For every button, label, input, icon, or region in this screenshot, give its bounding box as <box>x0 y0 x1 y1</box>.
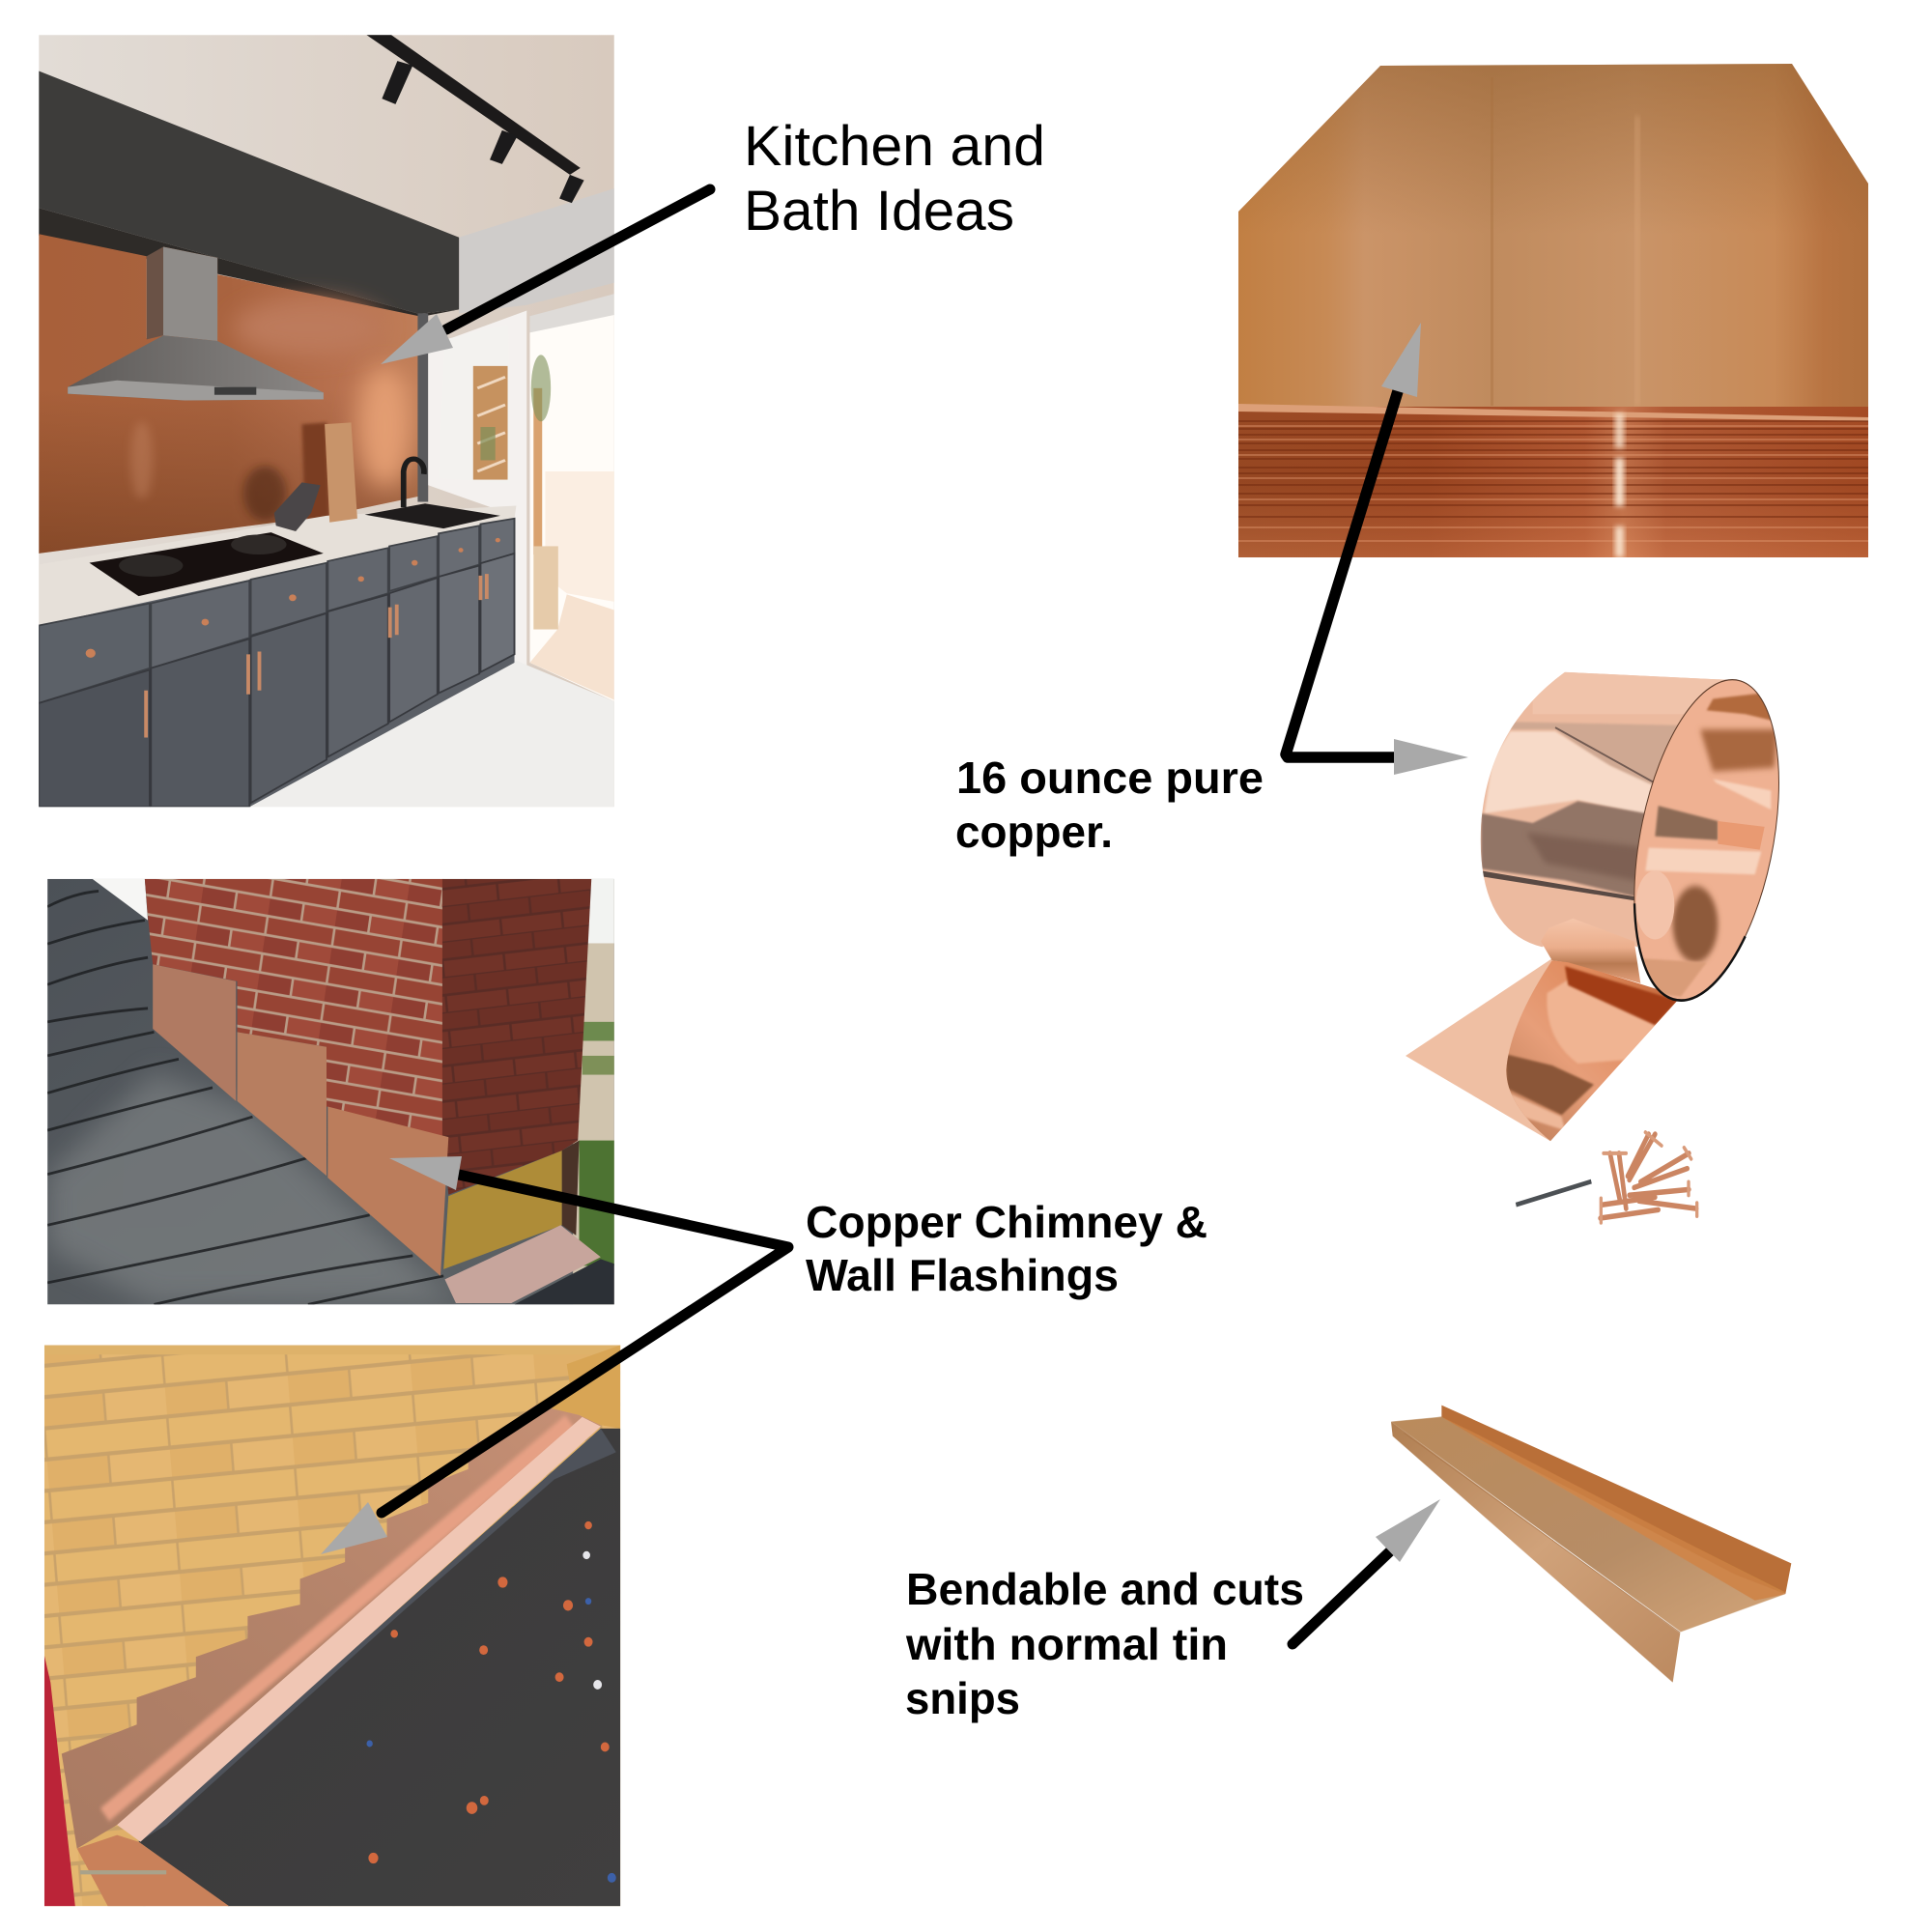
shingle lines <box>47 891 443 1304</box>
hob <box>89 532 324 596</box>
roof membrane <box>138 1429 620 1906</box>
copper backsplash <box>39 234 419 554</box>
curved tail <box>1506 960 1677 1142</box>
flat sheet tail <box>1406 958 1558 1141</box>
window <box>428 310 526 666</box>
text: Kitchen and Bath Ideas <box>744 115 1045 242</box>
copper flashing panels <box>153 964 236 1101</box>
roll interior <box>1634 680 1778 999</box>
text: Bendable and cuts with normal tin snips: snips <box>905 1673 1020 1723</box>
curl <box>1541 919 1640 983</box>
track lights <box>366 35 584 203</box>
base flashing <box>444 1225 601 1303</box>
arrow: to chimney and wall flashing <box>321 1156 788 1554</box>
cutting board <box>325 422 357 523</box>
range hood <box>68 246 324 400</box>
reflections <box>1528 1465 1761 1594</box>
photo: stepped copper flashing on yellow brick wall <box>44 1345 620 1906</box>
cabinets <box>39 519 515 807</box>
brick side <box>442 879 591 1195</box>
floor <box>249 660 614 807</box>
sink <box>365 503 500 528</box>
bottom copper <box>77 1835 229 1906</box>
text: Bendable and cuts with normal tin snips <box>905 1564 1304 1723</box>
photo: copper sheet stack <box>1238 58 1868 557</box>
top right copper <box>536 1345 620 1429</box>
sky gap <box>93 879 148 921</box>
front drop <box>1391 1422 1680 1683</box>
text: Kitchen and Bath Ideas: Bath Ideas <box>744 180 1014 242</box>
inner rim <box>1609 662 1804 1018</box>
copper highlight <box>104 1422 570 1815</box>
text: 16 ounce pure copper <box>955 753 1264 857</box>
roll outer surface <box>1475 668 1746 951</box>
text: Bendable and cuts with normal tin snips: with normal tin <box>905 1619 1228 1669</box>
nails <box>1601 1132 1697 1223</box>
brass corner flashing <box>443 1151 562 1269</box>
text: Copper Chimney and Wall Flashings: Wall Flashings <box>806 1250 1119 1300</box>
counter <box>39 506 516 607</box>
photo: copper Z-flashing <box>1391 1406 1791 1683</box>
arrow: to kitchen <box>381 189 710 364</box>
base <box>1391 1417 1785 1632</box>
balcony <box>529 294 614 701</box>
text: Bendable and cuts with normal tin snips: Bendable and cuts <box>906 1564 1304 1614</box>
text: 16 ounce pure copper: copper. <box>955 807 1113 857</box>
arrow: to copper sheet and roll <box>1286 323 1468 775</box>
photo: brick chimney with copper flashing <box>47 879 614 1304</box>
lit shingles <box>47 1072 456 1304</box>
text: 16 ounce pure copper: 16 ounce pure <box>956 753 1264 803</box>
drill bit <box>1516 1181 1591 1205</box>
back wall <box>1441 1406 1791 1594</box>
red post <box>44 1656 75 1906</box>
photo: copper roll with nails <box>1406 662 1804 1223</box>
text: Kitchen and Bath Ideas: Kitchen and <box>744 115 1045 178</box>
brick front <box>145 879 443 1137</box>
arrow: to Z-flashing <box>1293 1499 1440 1644</box>
right wall <box>459 188 614 313</box>
text: Copper Chimney and Wall Flashings: Copper Chimney & <box>806 1197 1208 1247</box>
light bend strip <box>117 1417 601 1842</box>
text: Copper Chimney and Wall Flashings <box>806 1197 1208 1300</box>
dark beam <box>39 71 459 314</box>
fastener dots <box>368 1521 610 1863</box>
knife block <box>274 482 321 531</box>
stepped copper <box>62 1405 601 1849</box>
right background <box>573 879 614 1304</box>
photo: kitchen with copper backsplash <box>39 35 614 807</box>
